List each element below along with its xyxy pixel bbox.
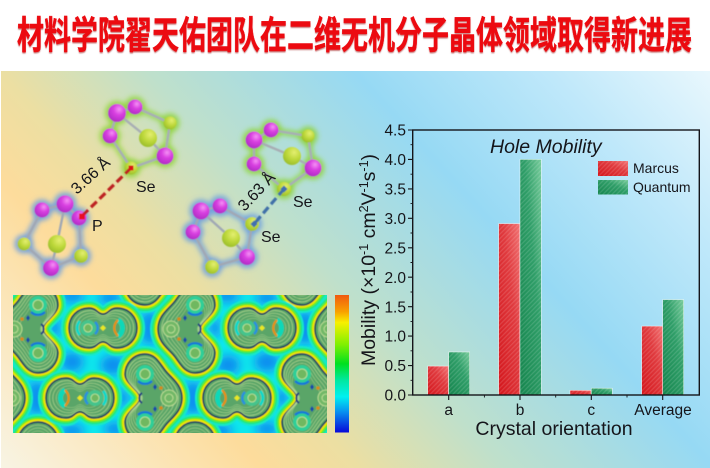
x axis tick labels: b xyxy=(516,402,524,419)
title: 材料学院翟天佑团队在二维无机分子晶体领域取得新进展 xyxy=(17,15,692,57)
y axis tick labels: 2.5 xyxy=(384,240,406,258)
y axis tick labels: 3.0 xyxy=(384,211,406,228)
x axis tick labels xyxy=(444,402,692,419)
bars: c xyxy=(570,388,612,395)
x axis tick labels: Average xyxy=(634,402,692,419)
y axis title: -1 xyxy=(357,244,371,255)
atom label Se: Se xyxy=(136,179,156,196)
y axis title: Mobility (×10 xyxy=(358,255,380,366)
tri-lobed contour islands xyxy=(13,295,327,433)
y axis tick labels: 4.0 xyxy=(384,152,406,169)
chart title: Hole Mobility xyxy=(490,136,603,158)
x axis tick labels: a xyxy=(444,402,453,419)
contour map xyxy=(13,295,327,433)
bar chart: hole mobility xyxy=(357,122,699,440)
bars: a xyxy=(428,352,470,395)
axes frame and ticks xyxy=(408,130,699,400)
y axis tick labels: 1.5 xyxy=(384,300,406,316)
legend xyxy=(598,160,691,195)
y axis tick labels: 0.5 xyxy=(384,358,406,375)
molecule: lower cage with blue glow xyxy=(18,196,88,276)
y axis tick labels: 2.0 xyxy=(384,270,406,287)
x axis title: Crystal orientation xyxy=(475,418,633,440)
molecule pairs xyxy=(18,100,322,276)
bars: b xyxy=(499,159,541,395)
legend: Marcus xyxy=(633,160,679,176)
bar hatching xyxy=(428,159,684,395)
y axis title: -1 xyxy=(357,160,371,172)
distance label 3.63 Å: 3.63 Å xyxy=(234,168,279,215)
red dashed contact line xyxy=(79,166,134,220)
peanut contour islands xyxy=(46,308,296,418)
y axis tick labels: 3.5 xyxy=(384,182,406,198)
y axis title: -1 xyxy=(357,181,371,192)
molecule: lower right cage with blue glow xyxy=(186,198,259,274)
y axis tick labels xyxy=(384,122,406,404)
distance label 3.66 Å: 3.66 Å xyxy=(67,153,114,198)
y axis title: ) xyxy=(358,154,380,160)
y axis tick labels: 0.0 xyxy=(384,388,406,404)
legend: Quantum xyxy=(633,179,691,195)
y axis title: 2 xyxy=(357,205,371,212)
x axis tick labels: c xyxy=(587,402,595,419)
atom label Se: Se xyxy=(261,229,281,246)
y axis tick labels: 4.5 xyxy=(384,122,406,140)
bars: Average xyxy=(642,300,684,395)
y axis tick labels: 1.0 xyxy=(384,329,406,346)
blue dashed contact line xyxy=(250,185,288,228)
colour scale bar xyxy=(335,295,349,432)
atom label P: P xyxy=(92,218,103,235)
molecule: upper cage with green glow xyxy=(102,100,176,174)
y axis title: V xyxy=(358,192,380,205)
y axis title: cm xyxy=(358,212,380,244)
y axis title: s xyxy=(358,171,380,181)
molecule: upper right cage with green glow xyxy=(246,122,322,196)
atom label Se: Se xyxy=(293,194,313,211)
